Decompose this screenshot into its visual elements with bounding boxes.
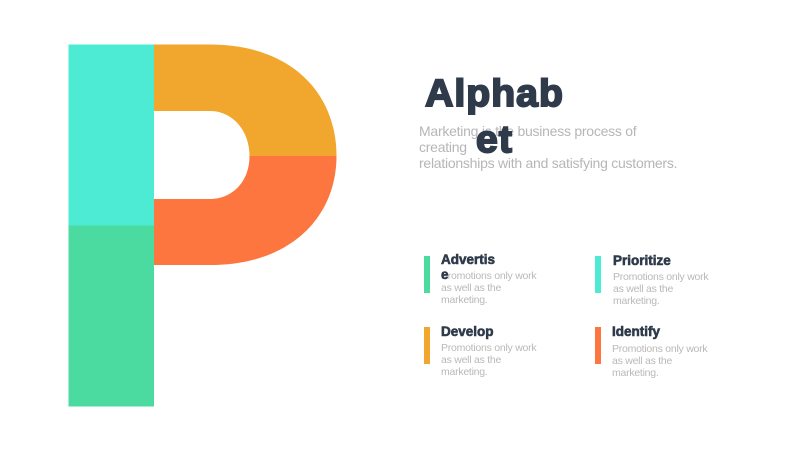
item heading: Identify [612, 324, 660, 339]
item: Identify [595, 324, 708, 379]
title: et [476, 119, 513, 161]
item heading: e [441, 267, 449, 282]
item text: as well as the [441, 282, 501, 294]
item text: as well as the [441, 354, 501, 366]
accent bar green [424, 256, 430, 293]
item text: as well as the [613, 283, 673, 295]
P stem bottom segment [68, 226, 154, 406]
item heading: Develop [441, 324, 494, 339]
item text [613, 271, 708, 307]
item heading: Advertis [441, 252, 495, 267]
accent bar orange [424, 327, 430, 364]
item text: marketing. [613, 295, 660, 307]
item text [441, 270, 536, 306]
item: Prioritize [595, 253, 708, 307]
description text: creating [419, 139, 467, 155]
P stem top segment [68, 44, 154, 226]
item text [441, 342, 536, 378]
description text: Marketing is the business process of [419, 123, 636, 139]
item text: marketing. [441, 366, 488, 378]
item text: as well as the [612, 355, 672, 367]
item: Advertise [424, 252, 536, 306]
item heading: Prioritize [613, 253, 671, 268]
item text: marketing. [441, 294, 488, 306]
item text: Promotions only work [441, 342, 536, 354]
P bowl top segment [154, 44, 336, 156]
item heading [440, 252, 495, 282]
description text [419, 123, 677, 171]
item text: Promotions only work [612, 343, 707, 355]
item text: Promotions only work [613, 271, 708, 283]
description text: relationships with and satisfying customers. [419, 155, 677, 171]
title: Alphab [425, 73, 564, 115]
title [424, 73, 564, 161]
P bowl bottom segment [154, 156, 336, 265]
item text [612, 343, 708, 379]
item text: Promotions only work [441, 270, 536, 282]
item: Develop [424, 324, 536, 378]
item text: marketing. [612, 367, 659, 379]
accent bar red-orange [595, 327, 601, 364]
accent bar teal [595, 256, 601, 293]
